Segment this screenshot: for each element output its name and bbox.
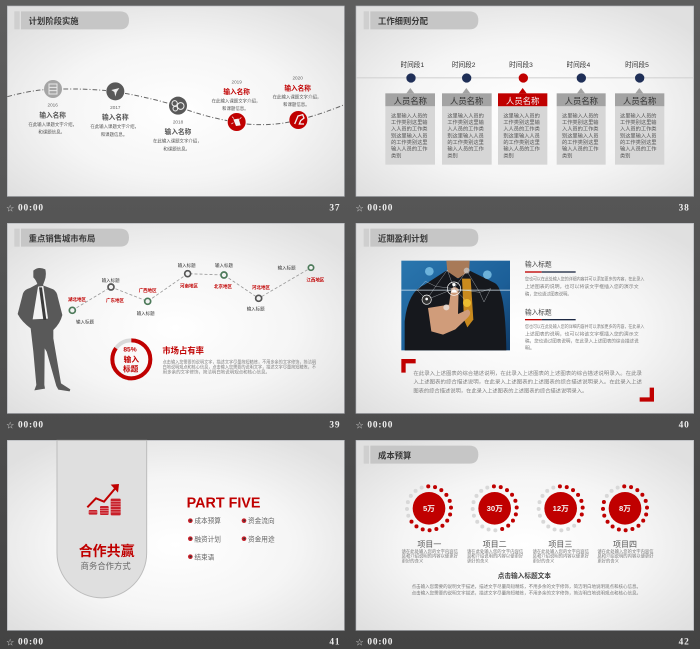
milestone 2017: 2017 xyxy=(110,105,121,110)
line chart of regions: 输入标题 xyxy=(102,277,120,284)
line chart of regions: 江西地区 xyxy=(306,276,325,283)
milestone 2019: 在此输入课题文字介绍， xyxy=(212,98,260,105)
donut chart 85%: 标题 xyxy=(123,363,139,373)
project 2 text: 更好的含义 xyxy=(467,557,489,564)
ring: 5万: 5万 xyxy=(423,504,435,513)
panel: slide 38 work allocation xyxy=(355,6,694,215)
heading: cost budget: 成本预算 xyxy=(378,450,411,460)
footer: ☆ xyxy=(355,421,364,432)
project 1 text: 更好的含义 xyxy=(402,557,424,564)
ring: 30万 xyxy=(472,486,517,531)
column 2: 这里输入人员的 xyxy=(447,111,484,119)
column 4: 入人员的工作类 xyxy=(562,125,599,133)
milestone 2019: 2019 xyxy=(231,79,242,84)
footer xyxy=(6,638,340,649)
milestone 2020: 输入名称 xyxy=(284,83,311,92)
column 2 xyxy=(442,60,492,165)
milestone 2017: 输入名称 xyxy=(102,113,129,122)
column 5: 的工作类别这里 xyxy=(620,138,657,146)
summary text xyxy=(412,571,641,596)
footer: 42 xyxy=(679,638,690,648)
project 1 text xyxy=(402,540,459,564)
column 5: 这里输入人员的 xyxy=(620,111,657,119)
milestone 2019: 输入名称 xyxy=(223,87,250,96)
column 4: 输入人员的工作 xyxy=(562,145,599,153)
text block 2: 稿，您也通过图表说明，在此录入上述图表的综合描述说 xyxy=(525,337,639,344)
column 5: 输入人员的工作 xyxy=(620,145,657,153)
column 5: 人员名称 xyxy=(623,96,656,106)
column 3 highlighted: 这里输入人员的 xyxy=(503,111,540,119)
milestone 2020: 在此输入课题文字介绍， xyxy=(273,94,321,101)
column 5 xyxy=(615,60,664,165)
heading: key sales cities xyxy=(14,229,129,247)
line chart of regions: 河北地区 xyxy=(252,284,270,291)
line chart of regions xyxy=(68,262,325,325)
corner bracket bottom right xyxy=(640,388,654,402)
column 5: 工作类别这里输 xyxy=(620,118,657,126)
ring: 8万: 8万 xyxy=(619,504,631,513)
contents list: 结束语 xyxy=(194,552,215,561)
column 2: 人员名称 xyxy=(450,96,483,106)
milestone 2018: 输入名称 xyxy=(165,127,192,136)
text block 1: 稿，您也通过图表说明。 xyxy=(525,290,572,297)
footer: 00:00 xyxy=(18,204,44,214)
milestone 2020: 2020 xyxy=(292,75,303,80)
column 4 xyxy=(557,60,606,165)
wavy timeline line xyxy=(7,89,344,125)
column 5: 时间段5 xyxy=(625,60,649,69)
milestone 2016: 2016 xyxy=(47,103,58,108)
column 1: 工作类别这里输 xyxy=(391,118,428,126)
footer: 00:00 xyxy=(18,638,44,648)
heading: work details: 工作细则分配 xyxy=(378,16,429,26)
contents list: 融资计划 xyxy=(194,534,221,543)
footer: 39 xyxy=(329,421,340,431)
project 2 text: 息和介绍说明的内容以便更好 xyxy=(467,553,524,560)
column 2: 入人员的工作类 xyxy=(447,125,485,133)
footer xyxy=(355,204,690,215)
column 5: 入人员的工作类 xyxy=(620,125,657,133)
panel: slide 40 profit plan xyxy=(355,223,694,432)
footer: 00:00 xyxy=(367,421,393,431)
column 1: 别这里输入人员 xyxy=(391,131,428,139)
heading: plan stages: 计划阶段实施 xyxy=(29,16,79,26)
column 3 highlighted: 入人员的工作类 xyxy=(503,125,541,133)
column 1: 人员名称 xyxy=(394,96,427,106)
footer xyxy=(6,204,340,215)
summary text: 点击输入标题文本 xyxy=(498,571,551,580)
text block 2: 您也可以在此处输入您的详细内容并可以添加更多的内容，在此录入 xyxy=(525,323,644,330)
column 1: 输入人员的工作 xyxy=(391,145,428,153)
market share text: 市场占有率 xyxy=(162,345,204,355)
column 3 highlighted: 的工作类别这里 xyxy=(503,138,540,146)
footer: ☆ xyxy=(6,638,14,649)
text block 1: 上述图表的说明，也可以将该文字框插入您的演示文 xyxy=(525,283,639,290)
milestone 2019 xyxy=(212,79,260,131)
column 4: 人员名称 xyxy=(565,96,598,106)
column 4: 的工作类别这里 xyxy=(562,138,599,146)
icon: rising chart with coins xyxy=(87,484,121,515)
column 4: 这里输入人员的 xyxy=(562,111,599,119)
milestone 2018: 和课题信息。 xyxy=(163,145,190,152)
column 3 highlighted: 人员名称 xyxy=(506,96,539,106)
line chart of regions: 湖北地区 xyxy=(68,296,86,303)
corner bracket top left xyxy=(401,359,416,373)
hanging tab xyxy=(57,440,147,598)
panel: slide 39 sales cities xyxy=(6,223,344,432)
column 1: 类别 xyxy=(391,151,401,159)
summary paragraph xyxy=(413,369,642,394)
footer: ☆ xyxy=(6,421,14,432)
summary text: 点击输入您需要的说明文字描述，描述文字尽量简短精炼，不用多余的文字修饰，简洁明白地说明观点和核心信息。 xyxy=(412,583,641,590)
contents list: 资金流向 xyxy=(248,516,275,525)
milestone 2019: 和课题信息。 xyxy=(222,105,249,112)
column 5: 别这里输入人员 xyxy=(620,131,657,139)
text block 2: 输入标题 xyxy=(525,307,552,316)
donut chart 85% xyxy=(112,340,150,378)
summary paragraph: 在此录入上述图表的综合描述说明，在此录入上述图表的上述图表的综合描述说明录入。在此录 xyxy=(413,369,642,377)
line chart of regions: 输入标题 xyxy=(137,310,155,317)
ring: 12万: 12万 xyxy=(553,504,569,513)
milestone 2018 xyxy=(153,97,202,152)
project 2 text xyxy=(467,540,524,564)
footer xyxy=(6,421,340,432)
column 3 highlighted xyxy=(498,60,547,165)
column 2: 别这里输入人员 xyxy=(447,131,484,139)
project 1 text: 项目一 xyxy=(417,540,441,549)
footer xyxy=(355,638,690,649)
footer: 00:00 xyxy=(367,638,393,648)
column 1: 时间段1 xyxy=(400,60,424,69)
market share text: 用多余的文字修饰，简洁明白地说明观点和核心信息。 xyxy=(163,368,270,375)
column 4: 时间段4 xyxy=(566,60,590,69)
project 2 text: 项目二 xyxy=(483,540,507,549)
footer: ☆ xyxy=(355,638,364,649)
photo: businessman touching network xyxy=(401,261,510,350)
summary paragraph: 入上述图表的综合描述说明，在此录入上述图表的上述图表的综合描述说明录入。在此录入上述 xyxy=(413,378,642,386)
milestone 2020 xyxy=(273,75,321,129)
line chart of regions: 输入标题 xyxy=(278,265,296,272)
footer: 00:00 xyxy=(367,204,393,214)
project 3 text: 请在此处输入您的文字内容信 xyxy=(533,548,590,555)
panel: slide 41 part five xyxy=(6,440,344,649)
line chart of regions: 输入标题 xyxy=(76,318,94,325)
tab subtitle: 商务合作方式 xyxy=(81,561,131,571)
column 5: 类别 xyxy=(620,151,630,159)
text block 2: 明。 xyxy=(525,345,535,351)
horizontal time axis xyxy=(356,76,694,79)
project 1 text: 息和介绍说明的内容以便更好 xyxy=(402,553,459,560)
heading: profit plan: 近期盈利计划 xyxy=(378,233,428,243)
ring: 12万 xyxy=(538,486,583,531)
footer: 37 xyxy=(329,204,340,214)
footer: 00:00 xyxy=(18,421,44,431)
project 1 text: 请在此处输入您的文字内容信 xyxy=(402,548,459,555)
market share text xyxy=(162,345,316,375)
project 3 text xyxy=(533,540,590,564)
heading: part five: PART FIVE xyxy=(187,495,260,511)
line chart of regions: 北京地区 xyxy=(214,283,232,290)
milestone 2016 xyxy=(28,80,77,135)
milestone 2018: 2018 xyxy=(173,120,184,125)
project 2 text: 请在此处输入您的文字内容信 xyxy=(467,548,524,555)
milestone 2017: 在此输入课题文字介绍， xyxy=(90,123,139,130)
column 2: 工作类别这里输 xyxy=(447,118,485,126)
text block 1 xyxy=(525,260,644,297)
column 3 highlighted: 时间段3 xyxy=(509,60,533,69)
column 2: 的工作类别这里 xyxy=(447,138,484,146)
text block 1: 您也可以在此处输入您的详细内容并可以添加更多的内容，在此录入 xyxy=(525,275,644,282)
summary paragraph: 图表的综合描述说明，在此录入上述图表的上述图表的综合描述说明录入。 xyxy=(413,386,587,394)
milestone 2016: 在此输入课题文字介绍， xyxy=(28,121,77,128)
column 2: 输入人员的工作 xyxy=(447,145,485,153)
column 1: 的工作类别这里 xyxy=(391,138,428,146)
milestone 2020: 和课题信息。 xyxy=(283,101,310,108)
project 4 text: 息和介绍说明的内容以便更好 xyxy=(597,553,654,560)
text block 2: 上述图表的说明，也可以将该文字框插入您的演示文 xyxy=(525,330,639,337)
line chart of regions: 输入标题 xyxy=(247,306,265,313)
line chart of regions: 河南地区 xyxy=(180,282,198,288)
project 4 text xyxy=(597,540,654,564)
column 4: 工作类别这里输 xyxy=(562,118,599,126)
project 3 text: 更好的含义 xyxy=(533,557,555,564)
project 4 text: 请在此处输入您的文字内容信 xyxy=(597,548,654,555)
milestone 2016: 输入名称 xyxy=(39,111,66,120)
heading: cost budget xyxy=(364,446,478,464)
footer: ☆ xyxy=(355,204,364,215)
column 4: 别这里输入人员 xyxy=(562,131,599,139)
heading: work details xyxy=(364,11,478,29)
column 1 xyxy=(385,60,435,165)
ring: 8万 xyxy=(602,486,648,531)
milestone 2016: 和课题信息。 xyxy=(38,128,65,135)
contents list: 资金用途 xyxy=(248,534,275,543)
column 2: 类别 xyxy=(447,151,458,159)
icon: businessman silhouette xyxy=(18,268,70,391)
donut chart 85%: 输入 xyxy=(124,354,139,364)
line chart of regions: 广西地区 xyxy=(139,287,157,294)
line chart of regions: 输入标题 xyxy=(178,262,196,269)
column 4: 类别 xyxy=(562,151,572,159)
heading: plan stages xyxy=(14,11,129,29)
panel: slide 37 timeline xyxy=(6,6,344,215)
footer: 40 xyxy=(679,421,690,431)
text block 2 xyxy=(525,307,644,351)
market share text: 点击输入您需要的说明文字，描述文字尽量简短精炼，不用多余的文字修饰，简洁明 xyxy=(163,359,316,366)
project 4 text: 项目四 xyxy=(613,540,637,549)
column 1: 这里输入人员的 xyxy=(391,111,428,119)
footer xyxy=(355,421,690,432)
contents list xyxy=(188,516,275,561)
tab title: 合作共赢 xyxy=(79,543,135,559)
heading: profit plan xyxy=(364,229,478,247)
column 3 highlighted: 输入人员的工作 xyxy=(503,145,541,153)
market share text: 白地说明观点和核心信息，点击输入您需要的说明文字，描述文字尽量简短精炼，不 xyxy=(163,363,316,370)
donut chart 85%: 85% xyxy=(123,347,137,354)
column 3 highlighted: 别这里输入人员 xyxy=(503,131,540,139)
column 3 highlighted: 类别 xyxy=(503,151,514,159)
footer: 38 xyxy=(679,204,690,214)
project 3 text: 项目三 xyxy=(548,540,572,549)
ring: 30万: 30万 xyxy=(487,504,503,513)
line chart of regions: 输入标题 xyxy=(215,262,233,269)
milestone 2017: 和课题信息。 xyxy=(101,131,127,138)
project 3 text: 息和介绍说明的内容以便更好 xyxy=(533,553,590,560)
column 1: 入人员的工作类 xyxy=(391,125,428,133)
column 3 highlighted: 工作类别这里输 xyxy=(503,118,541,126)
contents list: 成本预算 xyxy=(194,516,221,525)
line chart of regions: 广东地区 xyxy=(106,297,124,304)
milestone 2018: 在此输入课题文字介绍， xyxy=(153,138,202,145)
heading: key sales cities: 重点销售城市布局 xyxy=(29,233,95,243)
text block 1: 输入标题 xyxy=(525,260,552,269)
project 4 text: 更好的含义 xyxy=(597,557,620,564)
footer: ☆ xyxy=(6,204,14,215)
panel: slide 42 cost budget xyxy=(355,440,694,649)
milestone 2017 xyxy=(90,82,139,138)
footer: 41 xyxy=(329,638,340,648)
column 2: 时间段2 xyxy=(452,60,476,69)
ring: 5万 xyxy=(406,486,452,531)
summary text: 点击输入您需要的说明文字描述，描述文字尽量简短精炼，不用多余的文字修饰，简洁明白地说明观点和核心信息。 xyxy=(412,589,641,596)
